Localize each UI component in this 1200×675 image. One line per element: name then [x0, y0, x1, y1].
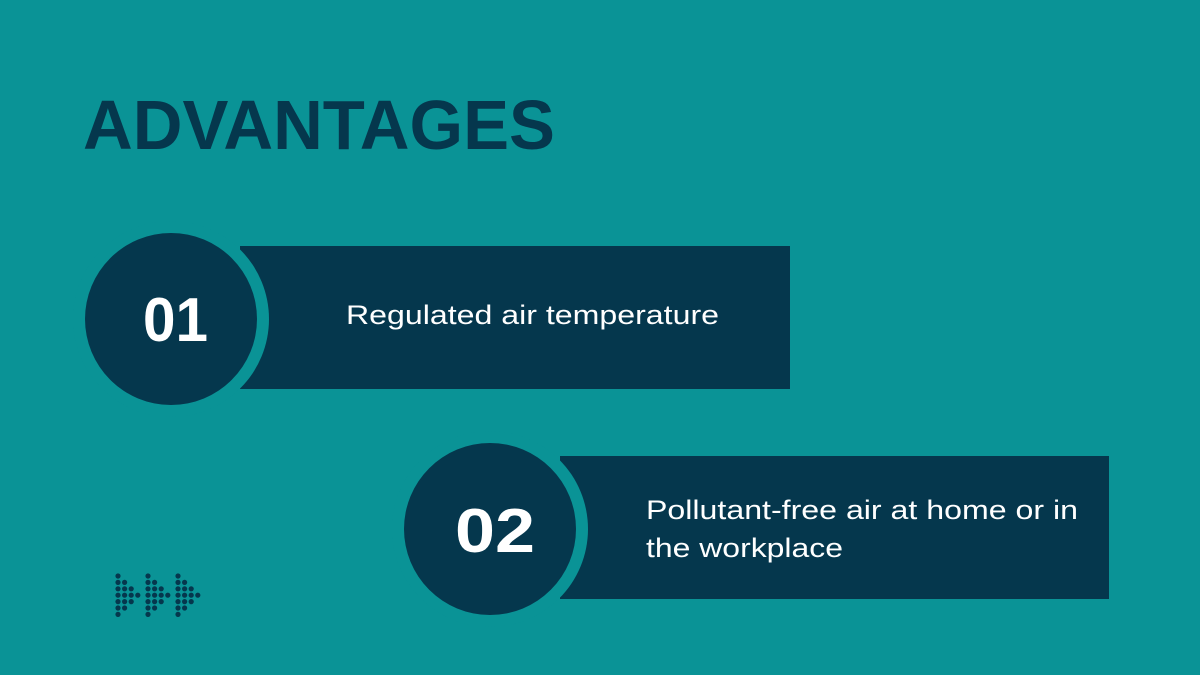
title: ADVANTAGES: [83, 86, 555, 164]
text: item 02: the workplace: [646, 533, 843, 563]
text: item 01: Regulated air temperature: [346, 300, 719, 330]
item 02: [392, 431, 1109, 627]
circle: 02: [404, 443, 576, 615]
bar: item 02: [560, 456, 1109, 599]
number 01: 01: [143, 286, 208, 355]
bar: item 01: [240, 246, 790, 389]
number 02: 02: [455, 497, 535, 566]
icon: dotted arrows: [115, 573, 200, 617]
text: item 02: Pollutant-free air at home or in: [646, 495, 1078, 525]
item 01: [73, 221, 790, 417]
circle: 01: [85, 233, 257, 405]
